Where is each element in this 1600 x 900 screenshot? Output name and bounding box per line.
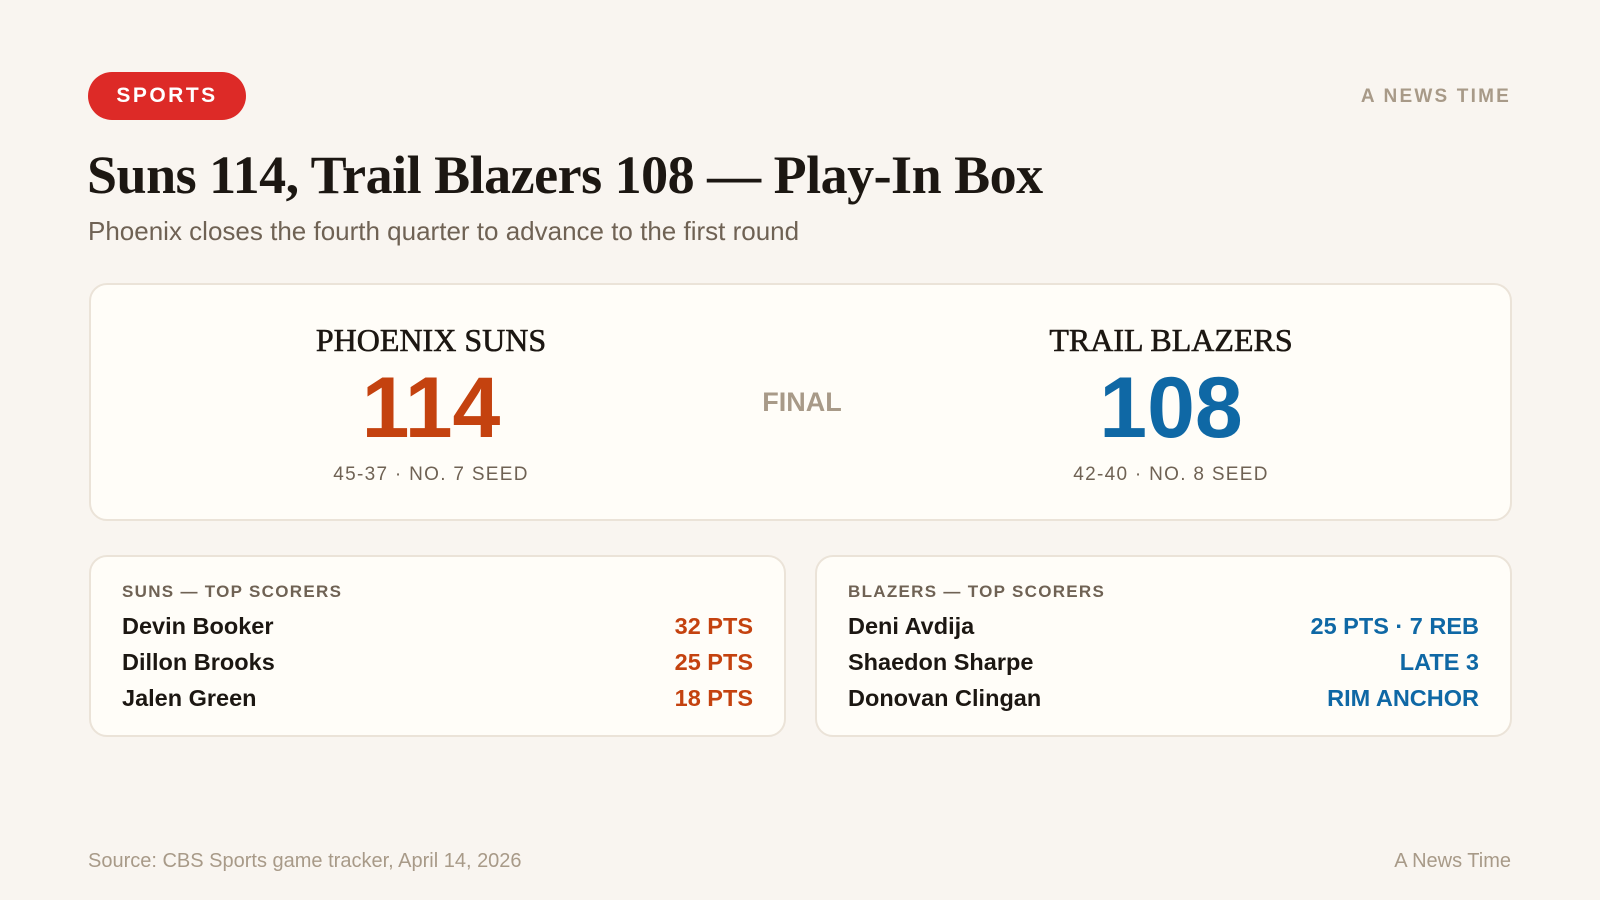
panel: suns top scorers — [89, 555, 786, 737]
row: green: 18 PTS — [675, 684, 753, 710]
team: phoenix suns — [316, 322, 546, 485]
row: booker — [122, 612, 753, 638]
badge: sports: SPORTS — [116, 84, 218, 107]
row: sharpe — [848, 648, 1479, 675]
row: brooks: 25 PTS — [675, 648, 753, 674]
panel heading: BLAZERS — TOP SCORERS — [848, 582, 1105, 601]
row: booker: Devin Booker — [122, 612, 274, 638]
row: clingan: Donovan Clingan — [848, 684, 1041, 710]
row: booker: 32 PTS — [675, 612, 753, 638]
brand top right: A NEWS TIME — [1361, 86, 1511, 107]
row: clingan: RIM ANCHOR — [1327, 684, 1479, 710]
team: phoenix suns: 45-37 · NO. 7 SEED — [333, 464, 529, 485]
subtitle: Phoenix closes the fourth quarter to advance to the first round — [88, 216, 799, 246]
panel: blazers top scorers — [815, 555, 1512, 737]
title: Suns 114, Trail Blazers 108 — Play-In Box — [87, 145, 1043, 205]
row: avdija: 25 PTS · 7 REB — [1311, 612, 1479, 638]
final label: FINAL — [762, 387, 842, 417]
team: trail blazers: TRAIL BLAZERS — [1049, 322, 1293, 358]
panel: scoreboard — [89, 283, 1512, 521]
panel heading: SUNS — TOP SCORERS — [122, 582, 342, 601]
badge: sports — [88, 72, 246, 120]
row: green: Jalen Green — [122, 684, 257, 710]
team: trail blazers — [1049, 322, 1293, 485]
footer: brand: A News Time — [1394, 850, 1511, 872]
row: brooks — [122, 648, 753, 674]
row: green — [122, 684, 753, 710]
footer: source: Source: CBS Sports game tracker, April 14, 2026 — [88, 850, 522, 872]
row: avdija — [848, 612, 1479, 639]
row: sharpe: LATE 3 — [1400, 648, 1479, 674]
team: trail blazers: 42-40 · NO. 8 SEED — [1073, 464, 1269, 485]
team: phoenix suns: 114 — [362, 360, 500, 456]
row: sharpe: Shaedon Sharpe — [848, 648, 1033, 674]
row: clingan — [848, 684, 1479, 711]
row: avdija: Deni Avdija — [848, 612, 974, 638]
team: trail blazers: 108 — [1099, 360, 1243, 456]
row: brooks: Dillon Brooks — [122, 648, 275, 674]
team: phoenix suns: PHOENIX SUNS — [316, 322, 546, 358]
